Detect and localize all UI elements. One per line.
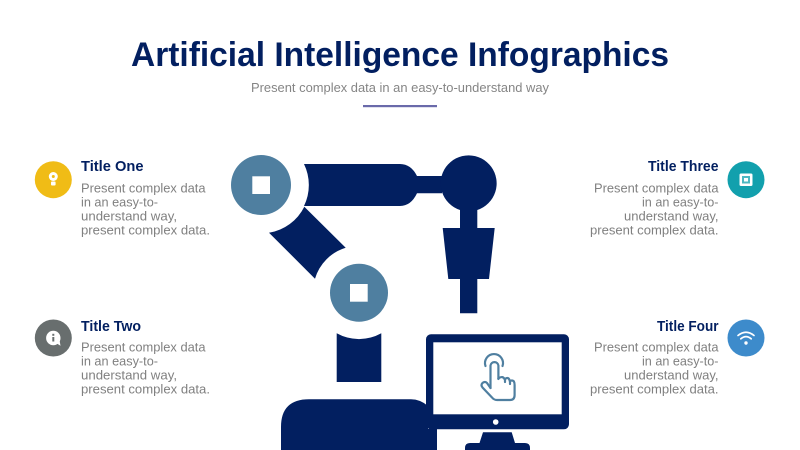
body text: understand way, (81, 368, 177, 382)
panel: title one (35, 158, 210, 238)
body text: Present complex data (594, 340, 719, 354)
body text: Present complex data (81, 182, 206, 196)
panel: title four (590, 318, 764, 396)
body text: understand way, (624, 210, 718, 224)
shoulder joint (231, 155, 291, 215)
panel: title three (590, 158, 764, 238)
body text: in an easy-to- (81, 354, 158, 368)
monitor frame (426, 334, 569, 429)
icon: pointing hand (482, 354, 515, 400)
body text: Present complex data (81, 340, 206, 354)
forearm (269, 207, 346, 279)
icon: light bulb (35, 161, 72, 198)
upper arm (304, 164, 442, 206)
body text: understand way, (81, 210, 177, 224)
wrist joint and gripper (441, 155, 497, 313)
body text: present complex data. (590, 382, 718, 396)
body text: present complex data. (81, 382, 210, 396)
body text: in an easy-to- (81, 196, 158, 210)
body text (590, 340, 719, 396)
heading: Title Two (81, 318, 141, 335)
base body (281, 399, 437, 450)
heading: Title One (81, 158, 144, 175)
body text (590, 182, 719, 238)
title: Artificial Intelligence Infographics (131, 36, 669, 74)
icon: wifi (728, 320, 764, 356)
elbow joint (330, 264, 388, 322)
body text: present complex data. (81, 224, 210, 238)
subtitle: Present complex data in an easy-to-understand way (251, 80, 549, 95)
body text: present complex data. (590, 224, 718, 238)
body text: understand way, (624, 368, 718, 382)
panel: title two (35, 318, 210, 396)
monitor stand (465, 432, 530, 450)
base column (337, 333, 381, 382)
heading: Title Three (648, 158, 718, 175)
heading: Title Four (657, 318, 719, 335)
body text: in an easy-to- (642, 354, 718, 368)
icon: microchip (728, 161, 764, 198)
icon: info speech bubble (35, 320, 72, 356)
title rule (363, 105, 437, 107)
monitor screen (433, 342, 562, 414)
body text: Present complex data (594, 182, 719, 196)
monitor power dot (493, 419, 499, 425)
body text (81, 340, 210, 396)
body text (81, 182, 210, 238)
body text: in an easy-to- (642, 196, 718, 210)
monitor (426, 334, 569, 450)
robot arm illustration (231, 155, 497, 450)
